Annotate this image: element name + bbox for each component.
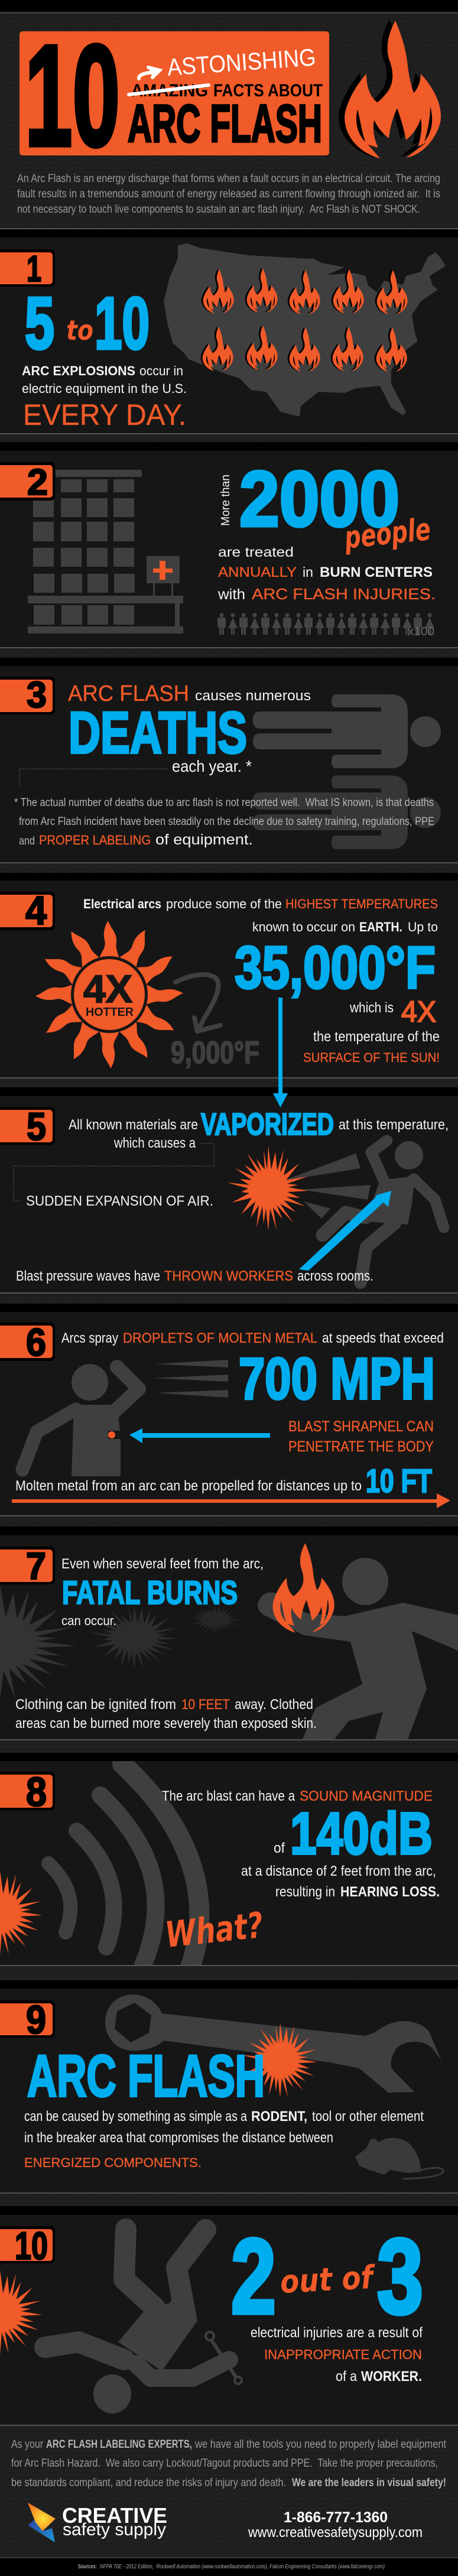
thrown worker figure <box>323 1141 444 1282</box>
title banner: FACTS ABOUT <box>213 81 323 100</box>
sound magnitude text: SOUND MAGNITUDE <box>300 1788 433 1804</box>
fact 1 text <box>22 363 187 431</box>
burst left <box>0 1870 42 1955</box>
title banner: ARC FLASH <box>128 95 322 154</box>
flame on arm <box>272 1543 334 1633</box>
badge 8 <box>0 1769 55 1815</box>
blast shrapnel text <box>288 1418 434 1455</box>
blast pressure text: Blast pressure waves have <box>16 1268 160 1284</box>
badge 3 <box>0 675 55 716</box>
explosion burst <box>227 1146 308 1231</box>
blast shrapnel text: PENETRATE THE BODY <box>288 1438 434 1455</box>
icon: sun 4x hotter <box>35 921 183 1068</box>
arrow: gray curved <box>176 974 220 1031</box>
sources: Sources: <box>78 2564 97 2570</box>
icon: flame <box>339 20 441 158</box>
intro lines: Electrical arcs <box>83 896 161 911</box>
fact 9 text: can be caused by something as simple as a <box>24 2109 248 2125</box>
fact 1 text: electric equipment in the U.S. <box>22 381 187 396</box>
panel: fact 8 <box>0 1761 458 1980</box>
flames grid <box>201 268 408 372</box>
stat: 5 to 10 <box>25 283 150 365</box>
contact details: 1-866-777-1360 <box>284 2509 388 2526</box>
heading: deaths <box>68 681 311 775</box>
badge 3: 3 <box>27 675 47 716</box>
arrow: orange distance <box>12 1493 450 1508</box>
blast pressure text: across rooms. <box>297 1268 373 1284</box>
burst on wrench <box>242 2022 317 2098</box>
sound magnitude text: at a distance of 2 feet from the arc, <box>241 1863 436 1879</box>
fact 10 text: WORKER. <box>361 2369 422 2385</box>
badge 10 <box>0 2224 55 2268</box>
fact 2 text <box>217 544 436 603</box>
closing text <box>11 2438 447 2489</box>
badge 1 <box>0 249 55 290</box>
sun temperature: 9,000°F <box>171 1035 259 1070</box>
heading: deaths: each year. * <box>172 757 252 775</box>
sources: NFPA 70E - 2012 Edition, Rockwell Automation (www.rockwellautomation.com), Falcon Engineering Consultants (www.falconengr.com) <box>100 2564 385 2570</box>
fact 5 heading line: which causes a <box>113 1135 196 1151</box>
rodent <box>355 2138 443 2179</box>
badge 7: 7 <box>26 1545 46 1587</box>
panel: fact 6 <box>0 1312 458 1526</box>
clothing text: areas can be burned more severely than exposed skin. <box>15 1716 317 1732</box>
panel: footer <box>0 2426 458 2558</box>
fact 4 lower text: the temperature of the <box>313 1029 440 1045</box>
fact 10 text: INAPPROPRIATE ACTION <box>264 2347 422 2362</box>
fact 9 text: ENERGIZED COMPONENTS. <box>24 2155 202 2170</box>
fact 5 heading line: at this temperature, <box>339 1117 449 1133</box>
title banner <box>20 15 329 176</box>
intro text <box>17 173 440 216</box>
arrow: blue from 35000F to vaporized <box>273 998 288 1107</box>
panel: fact 7 <box>0 1535 458 1753</box>
panel: fact 5 <box>0 1096 458 1304</box>
spray wedges <box>154 1360 228 1398</box>
panel: fact 4 <box>0 881 458 1087</box>
arrow: blue to worker <box>299 1191 391 1271</box>
heading: deaths: causes numerous <box>195 688 311 704</box>
panel: fact 2 <box>0 451 458 658</box>
badge 9 <box>0 1997 55 2042</box>
burst left <box>0 2270 42 2355</box>
blast wedges <box>283 1154 371 1219</box>
panel: header <box>0 14 458 229</box>
contact details: www.creativesafetysupply.com <box>248 2525 423 2541</box>
blast pressure text: THROWN WORKERS <box>164 1268 293 1284</box>
sound magnitude text <box>162 1788 440 1900</box>
fact 2 text: ANNUALLY <box>218 564 297 580</box>
logo: creative safety supply <box>28 2503 167 2542</box>
intro lines: EARTH. <box>359 920 402 934</box>
fact 9 text: RODENT, <box>251 2109 307 2125</box>
fact 5 heading line: All known materials are <box>69 1117 198 1133</box>
closing text: be standards compliant, and reduce the risks of injury and death. <box>11 2477 286 2489</box>
fatal burns heading: Even when several feet from the arc, <box>61 1556 264 1572</box>
fact 6 top line <box>61 1330 444 1346</box>
stat: 2 out of 3 <box>231 2217 423 2336</box>
arrow: blue to body <box>129 1428 270 1443</box>
heading: deaths: ARC FLASH <box>68 681 189 706</box>
fact 4 lower text <box>303 995 440 1065</box>
background bursts <box>0 1585 242 1701</box>
footnote <box>14 797 434 848</box>
stat: 5 to 10: 10 <box>95 283 150 365</box>
sound magnitude text: HEARING LOSS. <box>340 1884 440 1900</box>
badge 5: 5 <box>27 1105 46 1148</box>
fact 2 text: are treated <box>218 544 294 560</box>
fact 2 text: ARC FLASH INJURIES. <box>252 585 436 603</box>
fact 6 top line: DROPLETS OF MOLTEN METAL <box>123 1330 317 1346</box>
fact 4 lower text: which is <box>349 1000 394 1016</box>
stat: 2000 people: 2000 <box>239 456 399 543</box>
x100 label: x100 <box>408 625 434 638</box>
badge 8: 8 <box>26 1769 47 1815</box>
molten metal distance text <box>15 1462 432 1499</box>
fact 9 text: in the breaker area that compromises the distance between <box>24 2130 333 2146</box>
panel: fact 10 <box>0 2215 458 2426</box>
intro lines: HIGHEST TEMPERATURES <box>285 896 438 911</box>
fact 9 text: tool or other element <box>312 2109 424 2125</box>
falling worker figure <box>45 2229 242 2413</box>
fact 5 heading line: VAPORIZED <box>201 1107 334 1142</box>
sound magnitude text: The arc blast can have a <box>162 1788 295 1804</box>
closing text: ARC FLASH LABELING EXPERTS, <box>46 2438 192 2451</box>
fact 10 text: of a <box>336 2369 358 2385</box>
icon: sun 4x hotter: HOTTER <box>86 1006 134 1019</box>
fact 4 lower text: SURFACE OF THE SUN! <box>303 1050 440 1065</box>
badge 7 <box>0 1545 55 1587</box>
fact 6 top line: at speeds that exceed <box>322 1330 444 1346</box>
icon: sun 4x hotter: 4X <box>83 967 132 1011</box>
fact 2 text: BURN CENTERS <box>320 564 433 580</box>
stat: 5 to 10: 5 <box>25 283 54 365</box>
badge 10: 10 <box>15 2224 48 2268</box>
lying figures <box>253 694 441 849</box>
clothing text <box>15 1697 317 1732</box>
title banner: AMAZING <box>131 81 208 100</box>
fact 9 text <box>24 2109 424 2170</box>
fact 10 text <box>251 2325 423 2385</box>
sound magnitude text: resulting in <box>275 1884 335 1900</box>
badge 9: 9 <box>26 1997 46 2042</box>
closing text: As your <box>11 2438 44 2451</box>
title banner: ASTONISHING <box>166 44 317 81</box>
badge 6: 6 <box>26 1320 46 1364</box>
hospital building <box>28 470 183 634</box>
clothing text: Clothing can be ignited from <box>15 1697 176 1713</box>
worker figure with shrapnel <box>22 1364 139 1476</box>
intro lines: produce some of the <box>166 896 282 911</box>
sound waves <box>48 1764 199 1971</box>
heading: deaths: DEATHS <box>69 700 247 765</box>
people pictogram row <box>217 613 434 635</box>
badge 6 <box>0 1320 55 1364</box>
fact 1 text: EVERY DAY. <box>23 398 186 431</box>
clothing text: away. Clothed <box>235 1697 313 1713</box>
US map <box>164 243 446 417</box>
fatal burns heading: FATAL BURNS <box>62 1574 238 1611</box>
panel: fact 3 <box>0 666 458 873</box>
stat: 2000 people: More than <box>219 475 232 526</box>
intro lines: Up to <box>408 920 438 934</box>
fact 1 text: ARC EXPLOSIONS <box>22 363 135 378</box>
stat: 2 out of 3: out of <box>279 2259 377 2301</box>
title banner: 10 <box>25 15 120 176</box>
blast shrapnel text: BLAST SHRAPNEL CAN <box>288 1418 434 1435</box>
fact 2 text: with <box>217 586 245 603</box>
wrench <box>105 1994 441 2093</box>
footnote: and <box>19 835 35 847</box>
blast pressure text <box>16 1268 373 1284</box>
heading: arc flash: ARC FLASH <box>27 2043 265 2109</box>
logo: creative safety supply: safety supply <box>63 2520 166 2539</box>
intro lines <box>83 896 438 934</box>
running figure <box>258 1558 458 1739</box>
badge 4: 4 <box>25 888 47 933</box>
clothing text: 10 FEET <box>181 1697 230 1713</box>
fact 10 text: electrical injuries are a result of <box>251 2325 423 2341</box>
badge 2 <box>0 462 55 503</box>
molten metal distance text: Molten metal from an arc can be propelled for distances up to <box>15 1478 362 1494</box>
badge 4 <box>0 888 55 933</box>
fact 6 top line: Arcs spray <box>61 1330 118 1346</box>
hand-drawn arrow <box>139 67 160 79</box>
fact 5 heading line <box>69 1107 449 1151</box>
sound magnitude text: of <box>274 1840 285 1856</box>
logo: creative safety supply: CREATIVE <box>62 2503 167 2528</box>
fact 2 text: in <box>303 564 313 580</box>
badge 5 <box>0 1105 55 1148</box>
footnote: of equipment. <box>155 831 253 848</box>
sudden expansion text: SUDDEN EXPANSION OF AIR. <box>26 1193 213 1209</box>
fatal burns heading: can occur. <box>61 1613 116 1628</box>
badge 1: 1 <box>27 249 41 290</box>
stat: 5 to 10: to <box>66 314 93 346</box>
stat: 2 out of 3: 3 <box>377 2217 423 2336</box>
contact details <box>248 2509 423 2541</box>
fact 1 text: occur in <box>139 363 183 378</box>
panel: fact 9 <box>0 1989 458 2206</box>
what? hand lettering: What? <box>163 1905 265 1956</box>
fact 4 lower text: 4X <box>401 995 436 1028</box>
badge 2: 2 <box>27 462 48 503</box>
molten metal distance text: 10 FT <box>366 1462 432 1499</box>
panel: fact 1 <box>0 238 458 442</box>
stat: 2 out of 3: 2 <box>231 2217 276 2336</box>
footnote: PROPER LABELING <box>39 833 151 847</box>
fatal burns heading <box>61 1556 264 1628</box>
intro lines: known to occur on <box>252 920 355 934</box>
